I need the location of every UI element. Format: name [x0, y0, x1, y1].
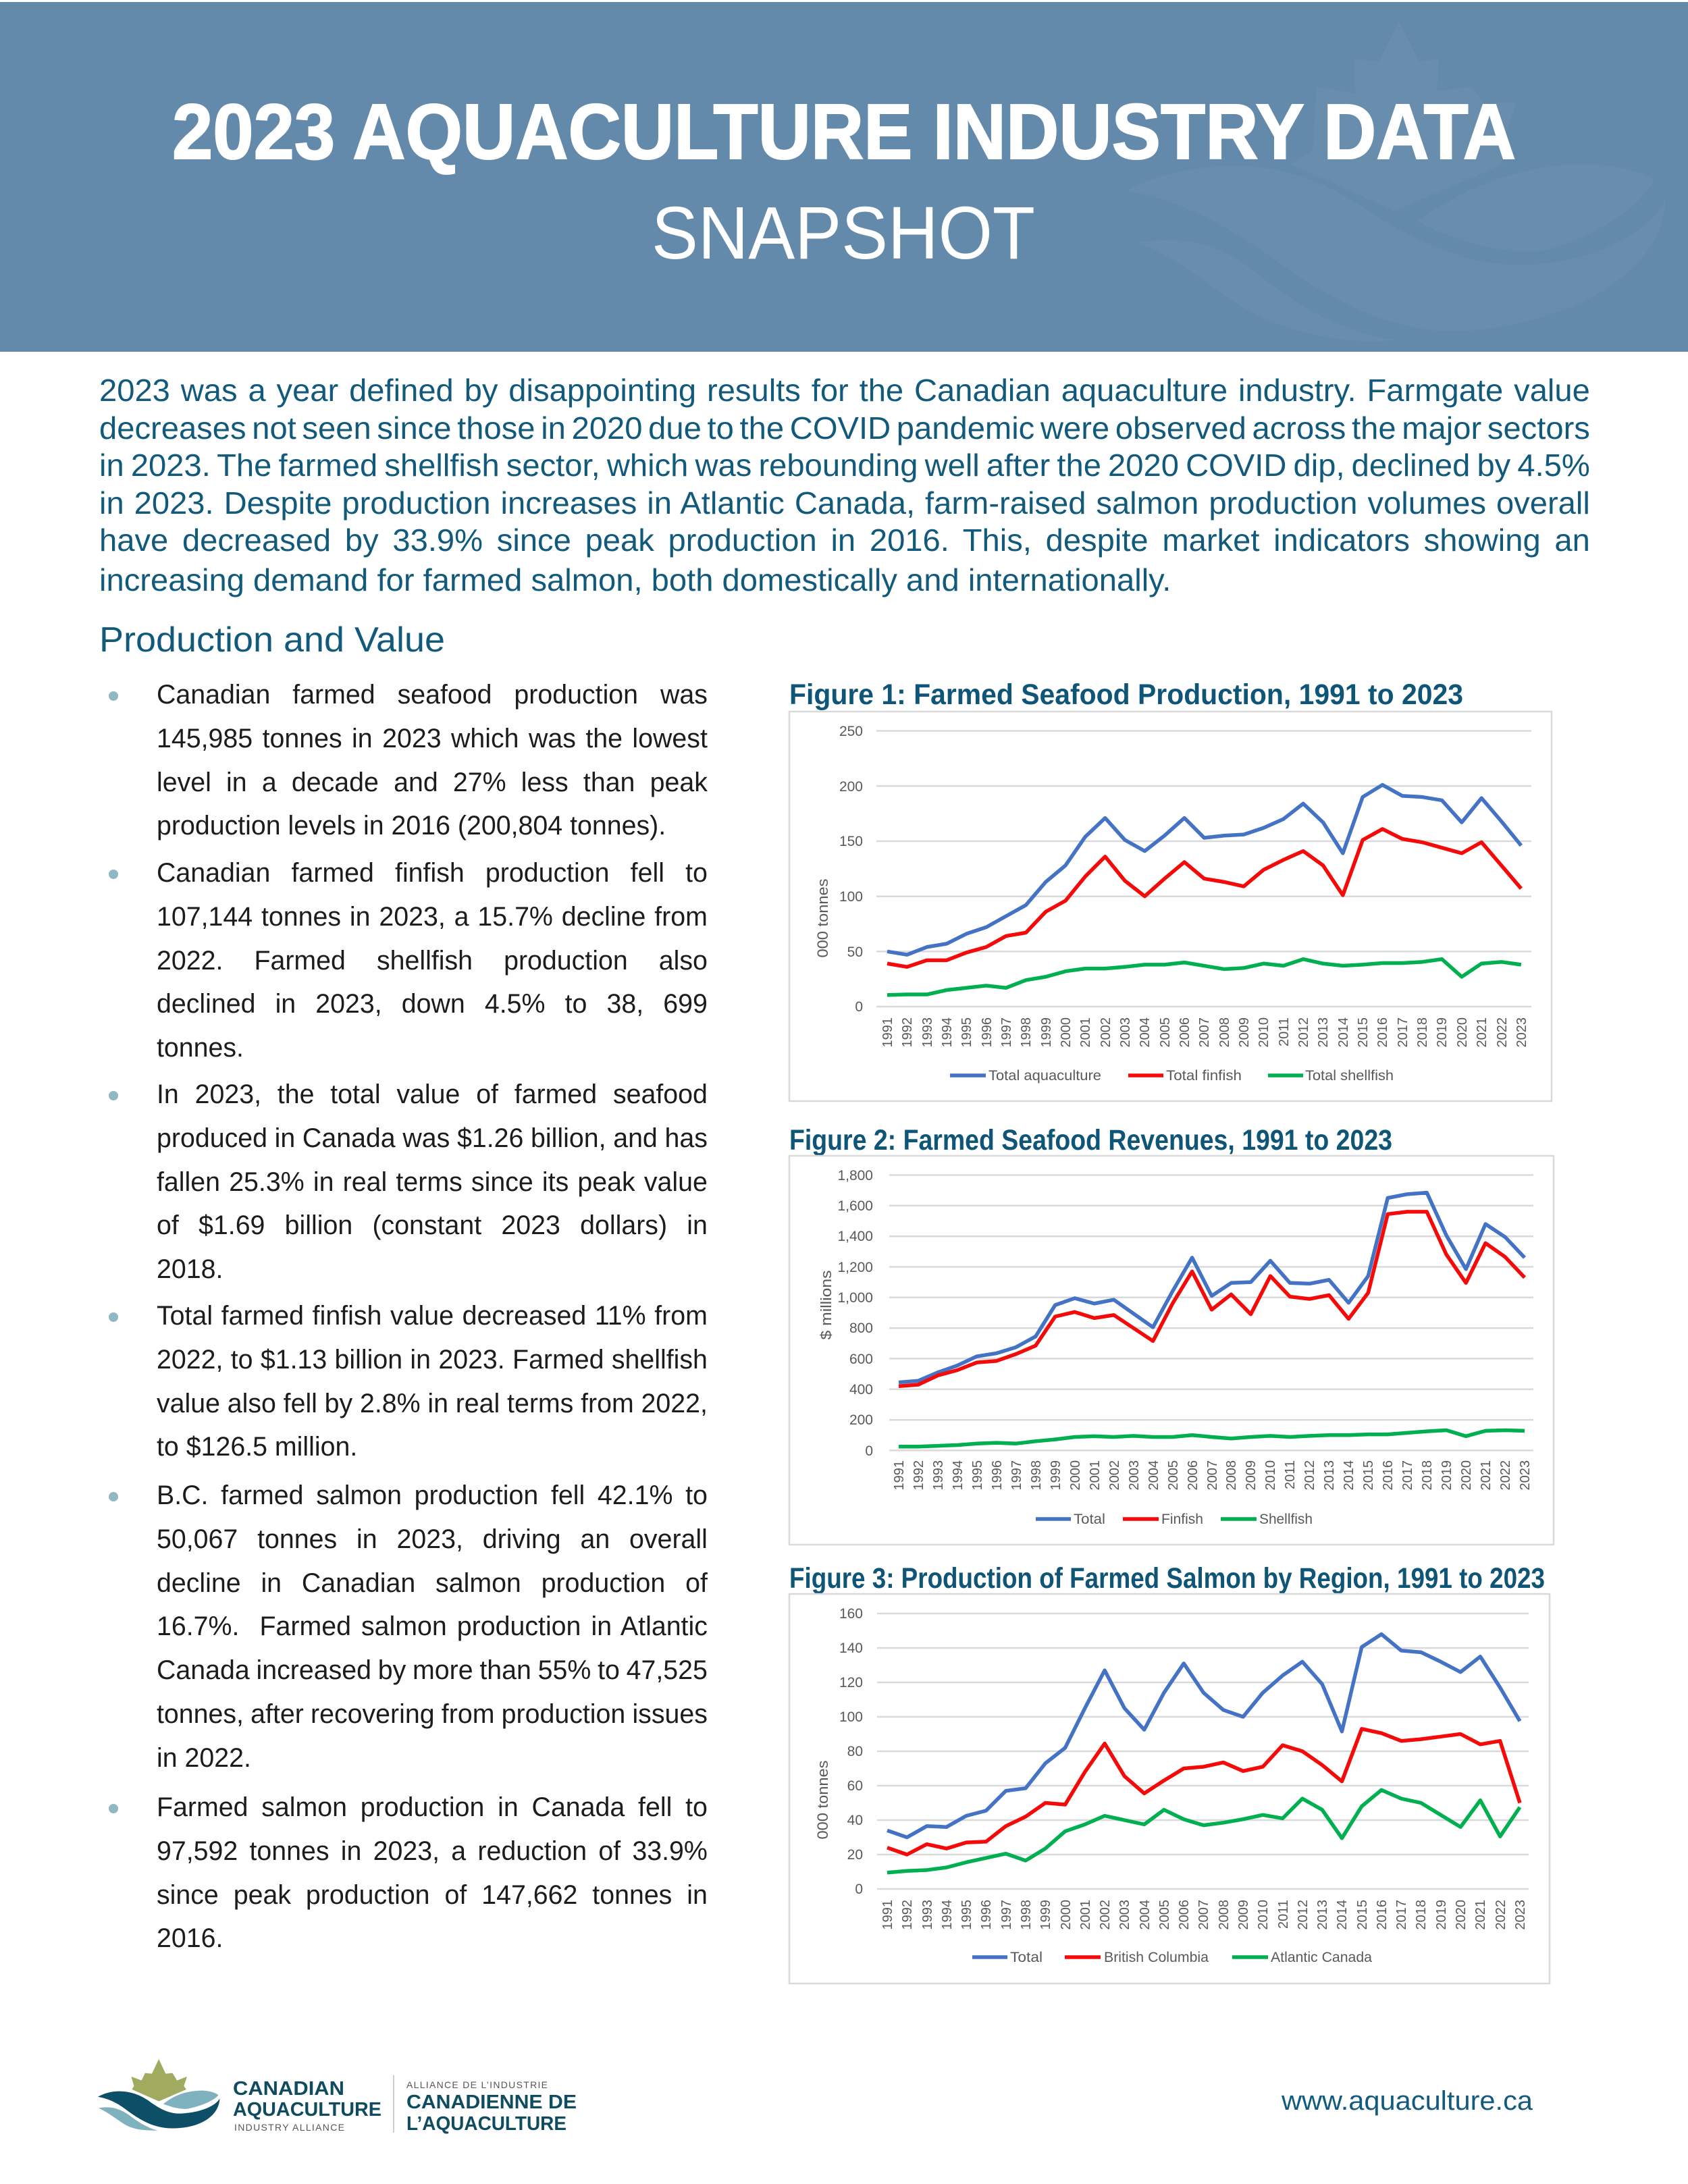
footer logo — [98, 2059, 577, 2135]
x axis year labels: 2011 — [1276, 1900, 1291, 1929]
y axis labels: 150 — [839, 834, 863, 849]
y axis labels: 160 — [839, 1606, 863, 1622]
x axis year labels: 2005 — [1157, 1900, 1172, 1929]
figure 2 chart — [789, 1154, 1554, 1546]
legend: Total — [1074, 1512, 1105, 1527]
bullet: total production: level in a decade and 27% less than peak — [157, 768, 708, 797]
x axis year labels: 2014 — [1336, 1017, 1351, 1048]
bullet: total production: 145,985 tonnes in 2023 which was the lowest — [157, 724, 708, 753]
line: british columbia — [887, 1729, 1520, 1855]
x axis year labels: 2023 — [1514, 1017, 1529, 1048]
english wordmark: CANADIAN — [233, 2078, 344, 2100]
x axis year labels: 2001 — [1078, 1017, 1093, 1048]
x axis year labels: 1996 — [979, 1900, 994, 1929]
x axis year labels: 2013 — [1322, 1460, 1337, 1491]
y axis labels: 0 — [855, 999, 863, 1015]
legend: Atlantic Canada — [1271, 1950, 1372, 1965]
x axis year labels: 1994 — [951, 1460, 966, 1491]
x axis year labels: 1997 — [999, 1900, 1014, 1929]
x axis year labels: 2014 — [1335, 1900, 1350, 1929]
x axis year labels: 2008 — [1224, 1460, 1239, 1491]
bullet: national salmon production: Farmed salmon production in Canada fell to — [157, 1792, 708, 1822]
bullet: finfish and shellfish production: Canadian farmed finfish production fell to — [157, 858, 708, 888]
y axis labels: 200 — [849, 1412, 873, 1428]
bullet: total production: Canadian farmed seafood production was — [157, 680, 708, 710]
bullet: regional salmon production: B.C. farmed salmon production fell 42.1% to — [157, 1481, 708, 1510]
figure 3 chart — [789, 1593, 1550, 1985]
x axis year labels: 2021 — [1479, 1460, 1494, 1491]
x axis year labels: 2007 — [1196, 1900, 1211, 1929]
bullet: finfish and shellfish production — [109, 858, 708, 1063]
x axis year labels: 1992 — [900, 1017, 915, 1048]
x axis year labels: 2020 — [1459, 1460, 1474, 1491]
bullet: regional salmon production: in 2022. — [157, 1743, 251, 1773]
bullet: finfish and shellfish production: 2022. Farmed shellfish production also — [157, 946, 708, 976]
legend: Total finfish — [1166, 1068, 1242, 1084]
bullet: finfish and shellfish value: to $126.5 million. — [157, 1432, 357, 1462]
legend: Total shellfish — [1305, 1068, 1394, 1084]
bullet: regional salmon production — [109, 1481, 708, 1773]
french wordmark: ALLIANCE DE L’INDUSTRIE — [406, 2079, 548, 2090]
website url: www.aquaculture.ca — [1281, 2086, 1533, 2116]
x axis year labels: 2020 — [1454, 1900, 1469, 1929]
x axis year labels: 2003 — [1118, 1017, 1133, 1048]
x axis year labels: 2001 — [1088, 1460, 1103, 1491]
y axis labels: 80 — [847, 1744, 863, 1759]
x axis year labels: 2004 — [1146, 1460, 1161, 1491]
x axis year labels: 2002 — [1107, 1460, 1122, 1491]
x axis year labels: 1992 — [900, 1900, 915, 1929]
x axis year labels: 2019 — [1440, 1460, 1454, 1491]
line: total shellfish — [887, 959, 1521, 995]
x axis year labels: 2002 — [1098, 1900, 1113, 1929]
y axis labels: 100 — [839, 889, 863, 905]
x axis year labels: 2018 — [1414, 1900, 1429, 1929]
x axis year labels: 1998 — [1019, 1017, 1034, 1048]
x axis year labels: 2013 — [1316, 1017, 1331, 1048]
x axis year labels: 1994 — [940, 1900, 955, 1929]
x axis year labels: 2006 — [1178, 1017, 1192, 1048]
bullet: total value: In 2023, the total value of farmed seafood — [157, 1080, 708, 1109]
title: 2023 AQUACULTURE INDUSTRY DATA — [172, 88, 1516, 176]
x axis year labels: 2013 — [1315, 1900, 1330, 1929]
y axis labels: 140 — [839, 1641, 863, 1656]
x axis year labels: 2003 — [1127, 1460, 1142, 1491]
x axis year labels: 1991 — [880, 1017, 895, 1048]
bullet: finfish and shellfish production: tonnes. — [157, 1033, 244, 1063]
x axis year labels: 2009 — [1244, 1460, 1259, 1491]
x axis year labels: 2016 — [1381, 1460, 1396, 1491]
x axis year labels: 1995 — [959, 1900, 974, 1929]
bullet: national salmon production: 2016. — [157, 1923, 223, 1953]
legend: Shellfish — [1259, 1512, 1313, 1527]
x axis year labels: 2023 — [1513, 1900, 1528, 1929]
x axis year labels: 2019 — [1434, 1900, 1449, 1929]
x axis year labels: 1993 — [920, 1017, 935, 1048]
legend: British Columbia — [1104, 1950, 1209, 1965]
x axis year labels: 2000 — [1068, 1460, 1083, 1491]
x axis year labels: 2014 — [1342, 1460, 1356, 1491]
x axis year labels: 2000 — [1059, 1017, 1074, 1048]
bullet: finfish and shellfish value — [109, 1301, 708, 1462]
x axis year labels: 2018 — [1415, 1017, 1430, 1048]
bullet: total production: production levels in 2016 (200,804 tonnes). — [157, 811, 666, 841]
x axis year labels: 2019 — [1435, 1017, 1450, 1048]
x axis year labels: 2010 — [1257, 1017, 1271, 1048]
x axis year labels: 2016 — [1375, 1900, 1390, 1929]
line: atlantic canada — [887, 1790, 1520, 1873]
x axis year labels: 2003 — [1117, 1900, 1132, 1929]
x axis year labels: 1998 — [1029, 1460, 1044, 1491]
x axis year labels: 2012 — [1296, 1900, 1311, 1929]
y axis labels: 60 — [847, 1778, 863, 1794]
x axis year labels: 2000 — [1059, 1900, 1074, 1929]
x axis year labels: 2005 — [1166, 1460, 1181, 1491]
x axis year labels: 1991 — [892, 1460, 907, 1491]
legend — [950, 1068, 1394, 1084]
english wordmark: INDUSTRY ALLIANCE — [234, 2122, 344, 2133]
x axis year labels: 2021 — [1473, 1900, 1488, 1929]
y axis labels — [837, 1168, 873, 1459]
x axis year labels: 1999 — [1049, 1460, 1063, 1491]
x axis year labels: 1993 — [931, 1460, 946, 1491]
bullet: finfish and shellfish value: value also fell by 2.8% in real terms from 2022, — [157, 1389, 708, 1418]
bullet: total value: 2018. — [157, 1254, 223, 1284]
x axis year labels: 2011 — [1283, 1460, 1298, 1489]
x axis year labels: 1996 — [990, 1460, 1005, 1491]
intro paragraph: in 2023. The farmed shellfish sector, which was rebounding well after the 2020 COVID dip, declined by 4.5% — [99, 448, 1590, 483]
bullet: finfish and shellfish production: 107,144 tonnes in 2023, a 15.7% decline from — [157, 902, 708, 932]
y axis labels: 0 — [865, 1443, 873, 1459]
x axis year labels: 1991 — [880, 1900, 895, 1929]
bullet: finfish and shellfish production: declined in 2023, down 4.5% to 38, 699 — [157, 989, 708, 1019]
intro paragraph: 2023 was a year defined by disappointing results for the Canadian aquaculture industry. Farmgate value — [99, 373, 1590, 408]
y axis labels: 250 — [839, 724, 863, 739]
x axis year labels: 2007 — [1197, 1017, 1212, 1048]
x axis year labels: 2006 — [1177, 1900, 1192, 1929]
x axis year labels: 2017 — [1396, 1017, 1410, 1048]
y axis labels — [839, 724, 863, 1015]
intro paragraph: have decreased by 33.9% since peak production in 2016. This, despite market indicators showing an — [99, 523, 1590, 558]
x axis year labels: 2017 — [1400, 1460, 1415, 1491]
x axis year labels: 2008 — [1217, 1017, 1232, 1048]
x axis year labels — [892, 1460, 1533, 1491]
x axis year labels — [880, 1900, 1528, 1929]
x axis year labels: 1996 — [980, 1017, 995, 1048]
y axis labels: 1,000 — [837, 1290, 873, 1306]
x axis year labels: 2011 — [1277, 1017, 1292, 1046]
x axis year labels: 2005 — [1158, 1017, 1173, 1048]
x axis year labels: 1995 — [959, 1017, 974, 1048]
y axis title: 000 tonnes — [814, 1760, 831, 1840]
bullet: national salmon production: 97,592 tonnes in 2023, a reduction of 33.9% — [157, 1836, 708, 1866]
intro paragraph: decreases not seen since those in 2020 due to the COVID pandemic were observed across the major sectors — [99, 410, 1590, 446]
bullet: national salmon production — [109, 1792, 708, 1953]
x axis year labels: 2008 — [1217, 1900, 1232, 1929]
subtitle: SNAPSHOT — [652, 192, 1035, 275]
bullet: regional salmon production: decline in Canadian salmon production of — [157, 1568, 708, 1598]
bullet: total value: of $1.69 billion (constant 2023 dollars) in — [157, 1210, 708, 1240]
y axis labels: 20 — [847, 1847, 863, 1863]
french wordmark: CANADIENNE DE — [406, 2092, 577, 2113]
x axis year labels: 2002 — [1099, 1017, 1113, 1048]
y axis labels: 100 — [839, 1709, 863, 1725]
x axis year labels: 2010 — [1263, 1460, 1278, 1491]
figure 1 title: Figure 1: Farmed Seafood Production, 1991 to 2023 — [789, 678, 1463, 711]
x axis year labels: 2022 — [1495, 1017, 1510, 1048]
line: shellfish revenue — [899, 1430, 1525, 1447]
y axis title: $ millions — [818, 1270, 835, 1340]
x axis year labels: 2015 — [1356, 1017, 1371, 1048]
legend: Total aquaculture — [988, 1068, 1101, 1084]
y axis labels: 1,800 — [837, 1168, 873, 1183]
bullet: national salmon production: since peak production of 147,662 tonnes in — [157, 1880, 708, 1910]
legend: Finfish — [1161, 1512, 1203, 1527]
bullet: finfish and shellfish value: Total farmed finfish value decreased 11% from — [157, 1301, 708, 1331]
y axis labels: 0 — [855, 1882, 863, 1897]
bullet: total value: fallen 25.3% in real terms since its peak value — [157, 1167, 708, 1197]
x axis year labels: 1995 — [970, 1460, 985, 1491]
x axis year labels: 1994 — [940, 1017, 955, 1048]
legend — [1036, 1512, 1313, 1527]
y axis title: 000 tonnes — [814, 878, 831, 958]
x axis year labels: 2004 — [1138, 1017, 1153, 1048]
figure 1 chart — [789, 710, 1553, 1102]
x axis year labels: 2020 — [1455, 1017, 1470, 1048]
intro paragraph: increasing demand for farmed salmon, both domestically and internationally. — [99, 562, 1171, 597]
line: total salmon — [887, 1634, 1520, 1838]
x axis year labels: 2009 — [1236, 1900, 1251, 1929]
bullet: regional salmon production: tonnes, after recovering from production issues — [157, 1699, 708, 1729]
bullet: regional salmon production: 16.7%. Farmed salmon production in Atlantic — [157, 1612, 708, 1641]
y axis labels: 120 — [839, 1675, 863, 1690]
x axis year labels: 1999 — [1039, 1017, 1054, 1048]
y axis labels: 1,200 — [837, 1260, 873, 1275]
x axis year labels: 1993 — [920, 1900, 935, 1929]
y axis labels: 400 — [849, 1382, 873, 1397]
x axis year labels: 2010 — [1256, 1900, 1271, 1929]
x axis year labels: 2021 — [1475, 1017, 1489, 1048]
y axis labels: 40 — [847, 1813, 863, 1828]
legend: Total — [1010, 1950, 1043, 1965]
x axis year labels: 2009 — [1237, 1017, 1252, 1048]
bullet: total value: produced in Canada was $1.26 billion, and has — [157, 1123, 708, 1153]
y axis labels: 50 — [847, 944, 863, 960]
legend — [972, 1950, 1372, 1965]
watermark logo — [1127, 22, 1666, 341]
heading: production and value: Production and Value — [99, 620, 445, 660]
y axis labels: 600 — [849, 1352, 873, 1367]
bullet: total value — [109, 1080, 708, 1284]
intro paragraph: in 2023. Despite production increases in Atlantic Canada, farm-raised salmon production volumes overall — [99, 485, 1590, 521]
y axis labels: 1,400 — [837, 1229, 873, 1244]
english wordmark — [233, 2078, 381, 2133]
x axis year labels: 2023 — [1518, 1460, 1533, 1491]
intro paragraph — [99, 373, 1590, 597]
line: total finfish — [887, 829, 1521, 967]
x axis year labels: 2015 — [1355, 1900, 1370, 1929]
x axis year labels: 1997 — [999, 1017, 1014, 1048]
x axis year labels: 1998 — [1019, 1900, 1034, 1929]
x axis year labels: 1997 — [1009, 1460, 1024, 1491]
y axis labels: 1,600 — [837, 1198, 873, 1214]
header banner — [0, 2, 1688, 352]
x axis year labels: 2012 — [1302, 1460, 1317, 1491]
x axis year labels: 2016 — [1375, 1017, 1390, 1048]
bullet: finfish and shellfish value: 2022, to $1.13 billion in 2023. Farmed shellfish — [157, 1345, 708, 1375]
x axis year labels: 2018 — [1420, 1460, 1435, 1491]
bullet: regional salmon production: Canada increased by more than 55% to 47,525 — [157, 1655, 708, 1685]
french wordmark — [406, 2079, 577, 2135]
x axis year labels: 2022 — [1494, 1900, 1508, 1929]
x axis year labels: 2015 — [1361, 1460, 1376, 1491]
line: finfish revenue — [899, 1212, 1525, 1386]
x axis year labels — [880, 1017, 1529, 1048]
x axis year labels: 2001 — [1078, 1900, 1093, 1929]
x axis year labels: 2004 — [1138, 1900, 1153, 1929]
english wordmark: AQUACULTURE — [233, 2099, 381, 2121]
y axis labels — [839, 1606, 863, 1897]
x axis year labels: 2007 — [1205, 1460, 1220, 1491]
x axis year labels: 2012 — [1296, 1017, 1311, 1048]
x axis year labels: 2006 — [1186, 1460, 1201, 1491]
y axis labels: 200 — [839, 779, 863, 795]
line: total aquaculture — [887, 785, 1521, 955]
y axis labels: 800 — [849, 1321, 873, 1336]
line: total revenue — [899, 1193, 1525, 1383]
x axis year labels: 1992 — [912, 1460, 926, 1491]
bullet: regional salmon production: 50,067 tonnes in 2023, driving an overall — [157, 1524, 708, 1554]
bullet: total production — [109, 680, 708, 841]
french wordmark: L’AQUACULTURE — [406, 2113, 566, 2135]
x axis year labels: 1999 — [1038, 1900, 1053, 1929]
icon: maple leaf and waves — [98, 2059, 219, 2131]
x axis year labels: 2022 — [1498, 1460, 1513, 1491]
x axis year labels: 2017 — [1394, 1900, 1409, 1929]
